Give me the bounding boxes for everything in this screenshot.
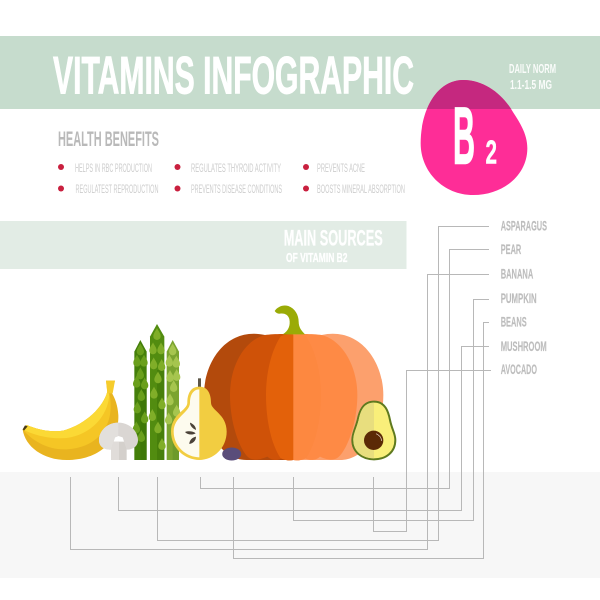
connector lines [70,226,491,558]
banana tip [23,425,28,431]
source labels: MUSHROOM [501,339,547,354]
health benefits heading: HEALTH BENEFITS [58,128,159,151]
benefits list [58,162,405,196]
benefits list: HELPS IN RBC PRODUCTION [75,162,152,175]
pear seeds [185,423,196,444]
source labels: PEAR [501,242,521,257]
avocado pit [364,431,383,450]
main sources heading: OF VITAMIN B2 [286,251,348,265]
daily norm: DAILY NORM [509,61,556,76]
pumpkin stem [275,305,305,334]
benefits list: REGULATEST REPRODUCTION [76,183,158,196]
bottom grey band [0,472,600,578]
benefits list: REGULATES THYROID ACTIVITY [191,162,281,175]
vitamin B2 badge [421,80,527,195]
asparagus [133,324,180,460]
source labels: AVOCADO [501,362,537,377]
benefits list: PREVENTS ACNE [317,162,365,175]
text: BOOSTS MINERAL ABSORPTION [317,183,405,196]
avocado [352,402,395,459]
daily norm: 1.1-1.5 MG [510,77,552,92]
daily norm [509,61,556,92]
source labels [501,219,547,377]
pear stem [198,378,201,388]
source labels: BANANA [501,267,533,282]
source labels: ASPARAGUS [501,219,547,234]
vitamin B2 badge: 2 [486,134,497,170]
banana stem [106,381,115,393]
pumpkin [204,305,383,460]
middle spear [149,324,166,460]
header band [0,36,600,109]
main sources heading: MAIN SOURCES [284,226,383,251]
source labels: PUMPKIN [501,291,537,306]
beans [222,448,241,460]
main sources heading [284,226,383,265]
source labels: BEANS [501,315,527,330]
mushroom [99,423,138,460]
main sources band [0,221,406,269]
vitamin B2 badge: B [453,92,475,182]
left spear [133,340,148,460]
pear [171,378,227,460]
banana [23,381,118,460]
right spear [165,340,180,460]
benefits list: PREVENTS DISEASE CONDITIONS [191,183,282,196]
